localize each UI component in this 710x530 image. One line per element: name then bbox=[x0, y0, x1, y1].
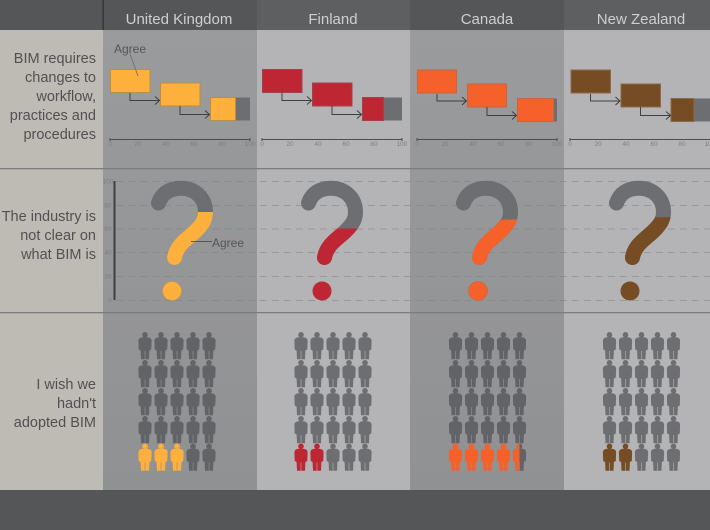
people chart: Canada bbox=[449, 332, 526, 471]
question chart grid and axis: 80 bbox=[104, 202, 112, 210]
workflow chart: United Kingdom: 80 bbox=[218, 141, 226, 148]
workflow chart: United Kingdom: 60 bbox=[190, 141, 198, 148]
row label: BIM requires changes: BIM requires bbox=[14, 51, 96, 67]
workflow chart: Canada: 100 bbox=[552, 141, 563, 148]
column headings: Finland bbox=[308, 11, 358, 28]
workflow chart: United Kingdom: 40 bbox=[162, 141, 170, 148]
workflow chart: Canada: 40 bbox=[469, 141, 477, 148]
row label: BIM requires changes: workflow, bbox=[35, 89, 96, 105]
column headings bbox=[126, 11, 685, 28]
question chart grid and axis: 100 bbox=[103, 178, 114, 186]
workflow chart: New Zealand bbox=[568, 70, 710, 148]
workflow chart: Finland: 80 bbox=[370, 141, 378, 148]
question chart grid and axis: 20 bbox=[104, 274, 112, 280]
annotation: Agree: Agree bbox=[212, 236, 244, 250]
row label: industry not clear: not clear on bbox=[20, 228, 96, 244]
question mark: Canada bbox=[464, 188, 510, 300]
workflow chart: United Kingdom: 0 bbox=[108, 141, 112, 148]
row label: industry not clear bbox=[2, 209, 96, 263]
workflow chart: New Zealand: 20 bbox=[594, 141, 602, 148]
workflow chart: United Kingdom: 20 bbox=[134, 141, 142, 148]
workflow chart: Finland: 20 bbox=[286, 141, 294, 148]
question chart grid and axis: 40 bbox=[104, 250, 112, 256]
workflow chart: Finland: 0 bbox=[260, 141, 264, 148]
question chart grid and axis bbox=[103, 178, 710, 304]
workflow chart: Canada: 60 bbox=[497, 141, 505, 148]
annotation: Agree: Agree bbox=[114, 42, 146, 56]
row label: BIM requires changes: procedures bbox=[23, 127, 96, 143]
question mark: Finland bbox=[308, 188, 356, 300]
workflow chart: Finland: 100 bbox=[397, 141, 408, 148]
people chart: United Kingdom bbox=[138, 332, 216, 471]
people chart: New Zealand bbox=[603, 332, 680, 471]
workflow chart: New Zealand: 0 bbox=[568, 141, 572, 148]
workflow chart: Finland: 40 bbox=[314, 141, 322, 148]
question chart grid and axis: 0 bbox=[108, 298, 112, 304]
question mark: New Zealand bbox=[616, 188, 664, 300]
workflow chart: Finland: 60 bbox=[342, 141, 350, 148]
column headings: Canada bbox=[461, 11, 514, 28]
workflow chart: New Zealand: 80 bbox=[678, 141, 686, 148]
workflow chart: New Zealand: 40 bbox=[622, 141, 630, 148]
question chart grid and axis: 60 bbox=[104, 226, 112, 233]
column headings: New Zealand bbox=[597, 11, 685, 28]
row label: wish not adopted: adopted BIM bbox=[14, 415, 96, 431]
question mark: United Kingdom bbox=[158, 188, 244, 300]
workflow chart: Canada: 20 bbox=[441, 141, 449, 148]
workflow chart: United Kingdom: 100 bbox=[245, 141, 256, 148]
workflow chart: United Kingdom bbox=[108, 42, 256, 148]
workflow chart: Canada: 0 bbox=[415, 141, 419, 148]
annotation: Agree bbox=[114, 42, 146, 76]
workflow chart: Canada bbox=[415, 70, 563, 148]
row label: BIM requires changes: changes to bbox=[25, 70, 96, 86]
people chart: Finland bbox=[294, 332, 372, 471]
row label: wish not adopted: hadn't bbox=[57, 396, 96, 412]
row label: wish not adopted bbox=[14, 377, 96, 431]
workflow chart: Canada: 80 bbox=[525, 141, 533, 148]
row label: BIM requires changes: practices and bbox=[10, 108, 96, 124]
row label: BIM requires changes bbox=[10, 51, 96, 143]
workflow chart: New Zealand: 60 bbox=[650, 141, 658, 148]
row label: industry not clear: what BIM is bbox=[20, 247, 96, 263]
workflow chart: Finland bbox=[260, 70, 408, 148]
row label: wish not adopted: I wish we bbox=[36, 377, 96, 393]
row label: industry not clear: The industry is bbox=[2, 209, 96, 225]
column headings: United Kingdom bbox=[126, 11, 232, 28]
